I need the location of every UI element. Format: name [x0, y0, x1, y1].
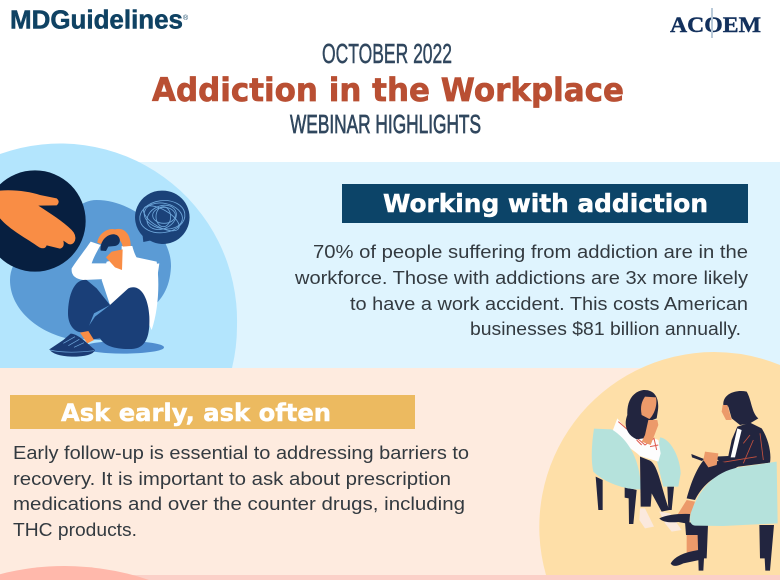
- illustration: distressed man: [0, 143, 237, 368]
- heading bar: working with addiction: [342, 184, 748, 223]
- logo: ACOEM: ACOEM: [670, 12, 761, 37]
- text block: early follow-up: Early follow-up is essential to addressing barriers to: [13, 443, 469, 463]
- panel: next section strip: [0, 566, 780, 580]
- text block: workforce statistics: workforce. Those with addictions are 3x more likely: [294, 268, 748, 288]
- heading bar: ask early, ask often: Ask early, ask often: [61, 399, 331, 427]
- panel: working with addiction: [0, 143, 780, 368]
- illustration: two people in conversation: [539, 352, 780, 575]
- logo: MDGuidelines: ®: [183, 14, 189, 22]
- panel: ask early, ask often: [0, 352, 780, 575]
- text block: workforce statistics: [294, 242, 748, 339]
- text block: early follow-up: THC products.: [13, 520, 137, 540]
- text block: early follow-up: recovery. It is important to ask about prescription: [13, 469, 451, 489]
- text block: early follow-up: medications and over the counter drugs, including: [13, 494, 465, 514]
- heading bar: ask early, ask often: [10, 395, 415, 429]
- text block: workforce statistics: 70% of people suffering from addiction are in the: [313, 242, 748, 262]
- text block: workforce statistics: businesses $81 billion annually.: [470, 319, 741, 339]
- title: main heading: Addiction in the Workplace: [152, 71, 624, 109]
- logo: MDGuidelines: MDGuidelines: [10, 6, 183, 34]
- text block: early follow-up: [13, 443, 469, 540]
- text block: workforce statistics: to have a work accident. This costs American: [350, 294, 748, 314]
- title: webinar highlights: WEBINAR HIGHLIGHTS: [290, 109, 481, 139]
- heading bar: working with addiction: Working with addiction: [383, 189, 708, 218]
- title: date: OCTOBER 2022: [322, 38, 452, 69]
